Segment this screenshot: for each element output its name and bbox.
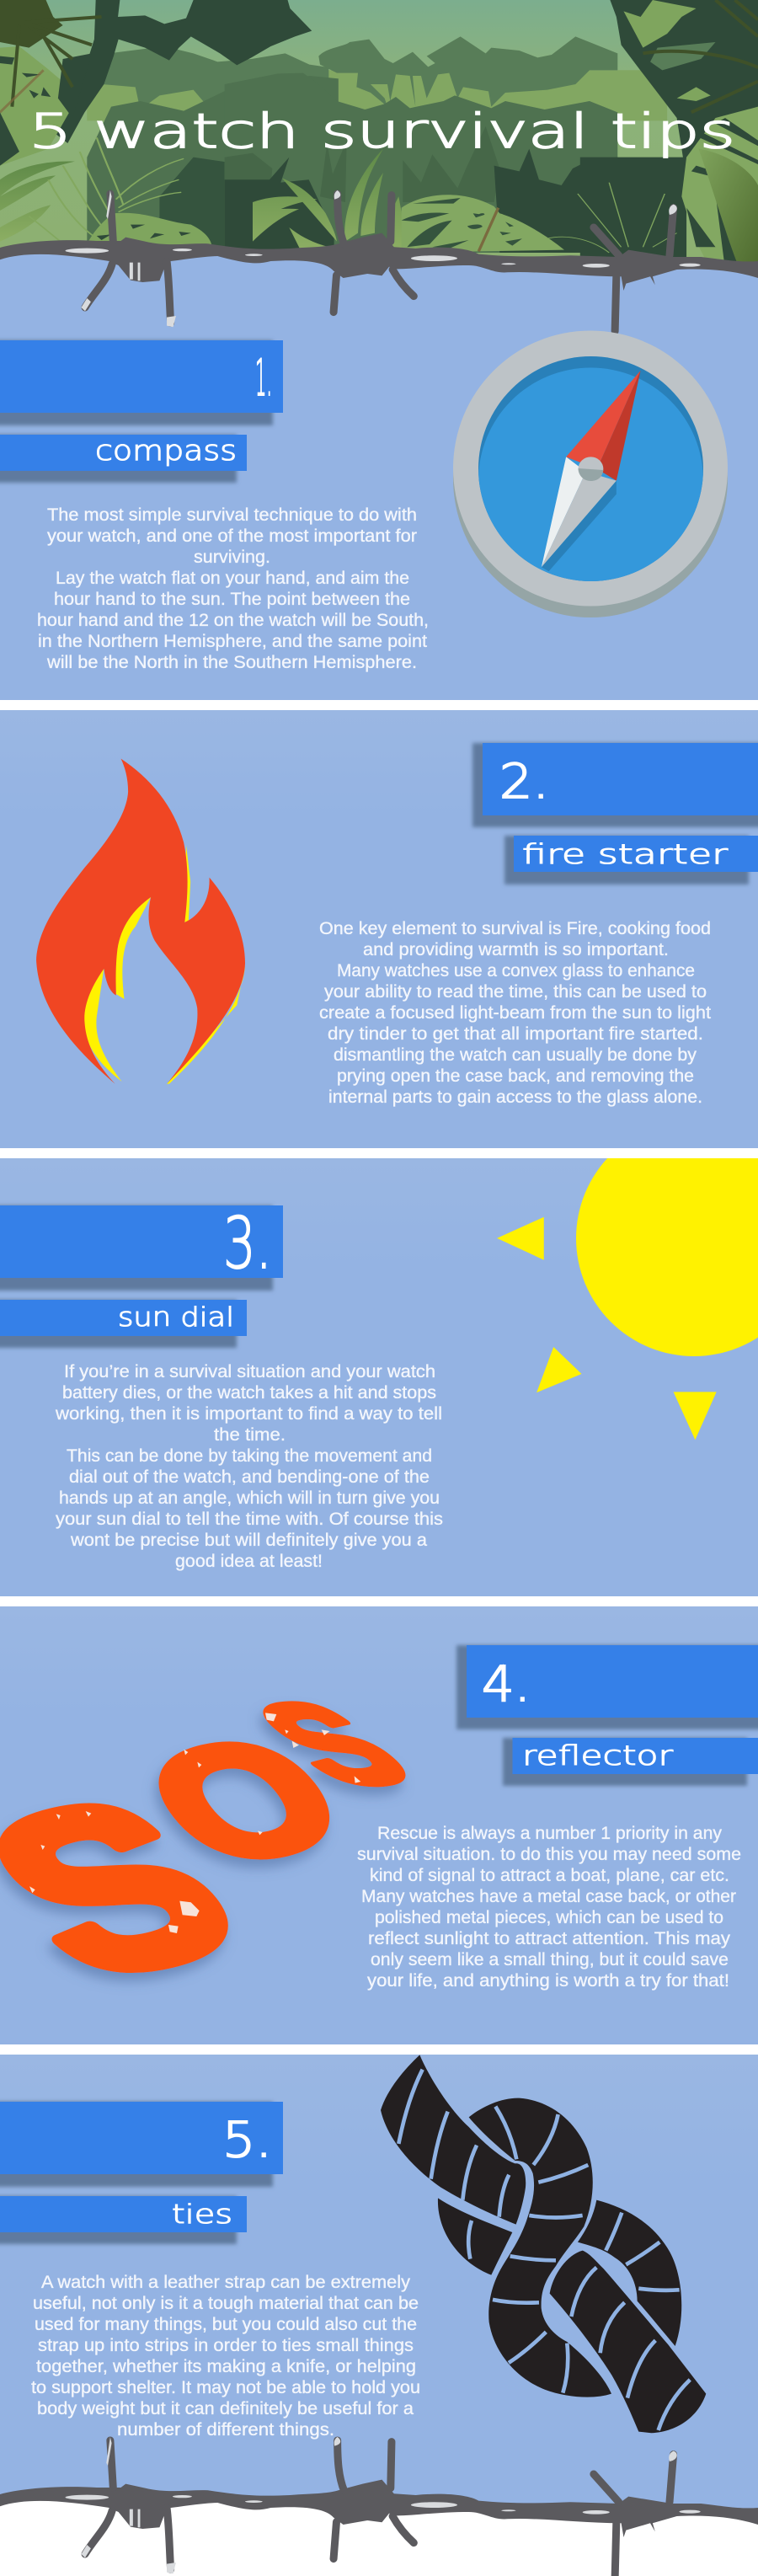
text block: reflector: only seem like a small thing, but it could save <box>371 1950 729 1969</box>
panel background: ties <box>0 2055 758 2576</box>
text block: ties: together, whether its making a knife, or helping <box>36 2357 416 2376</box>
number banner 1 <box>0 340 283 425</box>
text block: sun dial: wont be precise but will definitely give you a <box>70 1531 427 1550</box>
text block: fire starter <box>319 919 711 1107</box>
icon: SOS signal: S <box>219 1679 447 1809</box>
number banner 3: 3. <box>223 1202 272 1285</box>
number banner 3 <box>0 1202 283 1291</box>
text block: sun dial: working, then it is important to find a way to tell <box>55 1404 442 1424</box>
text block: fire starter: dry tinder to get that all important fire started. <box>328 1024 703 1044</box>
heading: reflector <box>503 1738 758 1786</box>
text block: compass: will be the North in the Southern Hemisphere. <box>46 653 417 672</box>
text block: ties: A watch with a leather strap can be extremely <box>41 2273 411 2292</box>
text block: reflector: your life, and anything is worth a try for that! <box>367 1971 729 1991</box>
white ground below bottom wire <box>0 2493 758 2576</box>
text block: ties: strap up into strips in order to ties small things <box>38 2336 414 2355</box>
text block: reflector <box>357 1824 741 1991</box>
text block: fire starter: Many watches use a convex glass to enhance <box>337 961 695 981</box>
heading: compass: compass <box>95 434 237 467</box>
panel: sun dial <box>0 1120 758 1571</box>
jungle banner <box>0 0 758 270</box>
number banner 2: 2. <box>499 755 549 810</box>
text block: reflector: Rescue is always a number 1 priority in any <box>377 1824 722 1843</box>
icon: sun <box>497 1158 758 1440</box>
text block: compass: hour hand and the 12 on the watch will be South, <box>37 611 429 630</box>
icon: SOS signal: O <box>109 1702 381 1899</box>
number banner 5: 5. <box>222 2111 272 2168</box>
text block: compass: your watch, and one of the most important for <box>47 526 417 546</box>
icon: SOS signal <box>0 1679 447 2024</box>
icon: compass <box>453 330 728 617</box>
text block: fire starter: create a focused light-beam from the sun to light <box>319 1003 711 1023</box>
number banner 2 <box>472 743 758 827</box>
panel background: fire starter <box>0 710 758 1148</box>
text block: sun dial: dial out of the watch, and bending-one of the <box>69 1467 430 1487</box>
text block: sun dial <box>55 1362 443 1571</box>
panel: reflector <box>0 1645 758 2024</box>
text block: fire starter: your ability to read the time, this can be used to <box>324 982 707 1002</box>
text block: compass: The most simple survival technique to do with <box>47 505 417 525</box>
text block: reflector: polished metal pieces, which can be used to <box>375 1908 723 1927</box>
text block: sun dial: If you’re in a survival situation and your watch <box>64 1362 435 1382</box>
heading: fire starter <box>504 836 758 884</box>
title: 5 watch survival tips <box>29 104 735 159</box>
text block: compass: surviving. <box>194 548 270 567</box>
text block: sun dial: your sun dial to tell the time with. Of course this <box>56 1510 443 1529</box>
heading: compass <box>0 434 247 483</box>
text block: fire starter: internal parts to gain access to the glass alone. <box>328 1088 702 1107</box>
text block: fire starter: dismantling the watch can usually be done by <box>334 1045 697 1065</box>
panel: compass <box>0 330 728 672</box>
heading: ties: ties <box>172 2199 232 2230</box>
heading: sun dial <box>0 1300 247 1348</box>
barbed wire top <box>0 190 758 331</box>
heading: sun dial: sun dial <box>118 1302 234 1333</box>
text block: fire starter: and providing warmth is so important. <box>363 940 669 959</box>
barbed wire bottom <box>0 2437 758 2576</box>
blue backdrop below barbed wire <box>0 247 758 365</box>
text block: fire starter: One key element to survival is Fire, cooking food <box>319 919 711 938</box>
text block: compass: Lay the watch flat on your hand, and aim the <box>56 569 409 588</box>
text block: sun dial: the time. <box>214 1425 286 1445</box>
number banner 4: 4. <box>482 1655 531 1713</box>
text block: sun dial: good idea at least! <box>175 1552 323 1571</box>
panel background: reflector <box>0 1606 758 2044</box>
section background: compass <box>0 337 758 700</box>
text block: sun dial: battery dies, or the watch takes a hit and stops <box>62 1383 436 1403</box>
text block: reflector: kind of signal to attract a boat, plane, car etc. <box>370 1866 729 1885</box>
text block: reflector: reflect sunlight to attract attention. This may <box>368 1929 731 1948</box>
number banner 5 <box>0 2102 283 2187</box>
text block: ties <box>31 2273 420 2440</box>
heading: fire starter: fire starter <box>522 838 729 870</box>
text block: sun dial: hands up at an angle, which will in turn give you <box>59 1488 440 1508</box>
heading: reflector: reflector <box>522 1740 674 1772</box>
number banner 1: 1. <box>255 349 272 408</box>
panel background: sun dial <box>0 1158 758 1596</box>
heading: ties <box>0 2196 247 2244</box>
panel: ties <box>0 2055 706 2440</box>
text block: fire starter: prying open the case back, and removing the <box>337 1066 694 1086</box>
text block: sun dial: This can be done by taking the movement and <box>67 1446 432 1466</box>
text block: ties: useful, not only is it a tough material that can be <box>33 2294 419 2313</box>
text block: ties: used for many things, but you could also cut the <box>35 2315 417 2334</box>
text block: compass: hour hand to the sun. The point between the <box>54 590 410 609</box>
panel: fire starter <box>36 743 758 1107</box>
text block: reflector: survival situation. to do this you may need some <box>357 1845 741 1864</box>
number banner 4 <box>456 1645 758 1729</box>
text block: compass <box>37 505 429 672</box>
icon: flame <box>36 759 245 1084</box>
icon: knot <box>381 2055 706 2433</box>
text block: compass: in the Northern Hemisphere, and the same point <box>38 632 427 651</box>
text block: ties: to support shelter. It may not be able to hold you <box>31 2378 420 2397</box>
text block: ties: body weight but it can definitely be useful for a <box>37 2399 414 2418</box>
text block: reflector: Many watches have a metal case back, or other <box>361 1887 736 1906</box>
text block: ties: number of different things. <box>117 2420 334 2440</box>
